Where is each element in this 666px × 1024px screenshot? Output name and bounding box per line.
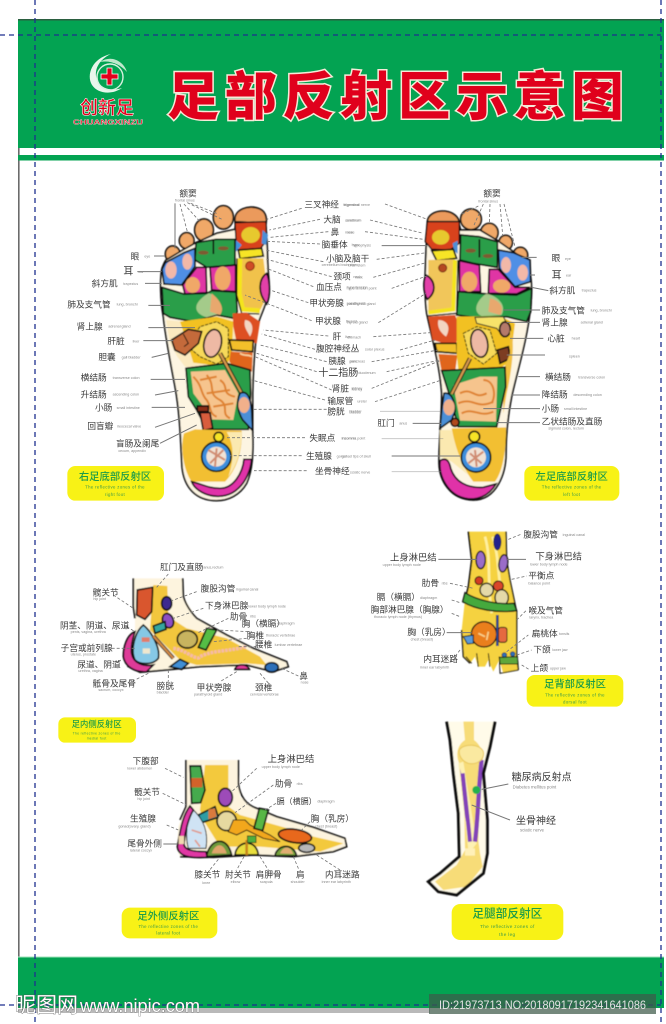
left foot labels: frontal sinus (478, 199, 498, 203)
left foot labels: stomach (347, 335, 361, 339)
instep labels: diaphragm (420, 596, 437, 600)
left foot labels: 肛门 (377, 417, 395, 428)
left foot labels: pancreas (350, 360, 365, 364)
left foot labels: transverse colon (578, 375, 605, 379)
outer foot labels: 膈（横膈） (277, 796, 317, 806)
left foot labels: 肾上腺 (542, 317, 568, 328)
callout: left foot: left foot (563, 492, 581, 497)
footer banner (18, 956, 664, 1013)
right foot labels: cerebrum (345, 218, 360, 222)
right foot labels: 输尿管 (327, 395, 354, 406)
instep labels (371, 528, 585, 673)
panel: right foot sole (67, 188, 370, 501)
left foot labels: hypophysis (353, 244, 371, 248)
right foot labels: 小脑及脑干 (326, 253, 370, 264)
right foot labels: 胰腺 (328, 355, 346, 366)
instep labels: 内耳迷路 (423, 653, 458, 664)
instep labels: 肋骨 (422, 578, 439, 588)
left foot labels: ureter (357, 400, 368, 404)
left foot labels: 耳 (552, 269, 562, 281)
inner foot labels: urethra, vagina (78, 669, 104, 673)
inner foot labels: 骶骨及尾骨 (93, 679, 136, 689)
left foot labels (342, 188, 612, 474)
right foot labels: parathyroid (347, 302, 365, 306)
instep labels: 胸部淋巴腺（胸腺） (371, 604, 449, 615)
left foot labels: hypertension point (347, 286, 377, 290)
leg labels (512, 771, 572, 833)
instep leader lines (438, 534, 532, 670)
left foot labels: heart (572, 337, 580, 341)
left foot labels: trapezius (582, 289, 597, 293)
inner foot labels: uterus, prostate (71, 652, 96, 656)
instep labels: inner ear labyrinth (420, 665, 449, 669)
callout: left foot (524, 466, 619, 501)
inner foot leader lines (108, 574, 298, 685)
outer foot illustration (177, 760, 347, 858)
outer foot labels (118, 753, 360, 885)
inner foot labels: 颈椎 (255, 682, 273, 693)
inner foot labels: 子宫或前列腺 (61, 642, 113, 653)
instep labels: larynx, trachea (529, 616, 554, 620)
right foot labels: 小肠 (95, 403, 113, 413)
right foot labels: trigeminal (343, 203, 359, 207)
right foot labels: frontal sinus (175, 199, 195, 203)
panel: leg (428, 722, 572, 940)
right foot labels: 三叉神经 (304, 198, 339, 209)
inner foot labels: lower body lymph node (248, 604, 286, 608)
callout: right foot: The reflective zones of the (85, 485, 145, 490)
inner foot labels: 肋骨 (230, 611, 247, 621)
callout: instep (527, 675, 623, 707)
left foot labels: 乙状结肠及直肠 (542, 415, 603, 426)
inner foot labels: inguinal canal (236, 588, 259, 592)
left foot labels: duodenum (358, 371, 376, 375)
instep labels: 胸（乳房） (407, 626, 451, 637)
inner foot labels: 髋关节 (93, 586, 119, 597)
right foot labels: 生殖腺 (306, 450, 332, 461)
outer foot labels: 尾骨外侧 (127, 838, 162, 849)
outer foot labels: 肩胛骨 (256, 869, 282, 880)
right foot labels: 血压点 (316, 281, 342, 292)
outer foot labels: 内耳迷路 (325, 869, 360, 880)
right foot labels: eye (144, 255, 150, 259)
right foot labels: bladder (349, 410, 362, 414)
outer foot labels: 上身淋巴结 (268, 753, 314, 764)
callout: inner foot (58, 717, 136, 743)
callout: right foot: right foot (105, 492, 126, 497)
instep labels: upper jaw (550, 666, 566, 670)
right foot labels: 鼻 (331, 226, 340, 237)
right foot labels: 肾上腺 (77, 320, 103, 331)
left foot labels: 心脏 (547, 333, 565, 344)
logo (73, 54, 143, 126)
left foot labels: ear (566, 274, 572, 278)
instep labels: upper body lymph node (383, 563, 421, 567)
callout: leg: the leg (499, 932, 516, 937)
inner foot labels: 尿道、阴道 (77, 659, 121, 670)
instep labels: ribs (442, 581, 448, 585)
instep labels: lower jaw (552, 648, 568, 652)
inner foot labels (60, 561, 309, 697)
instep illustration (462, 532, 518, 673)
instep labels: lower body lymph node (530, 562, 568, 566)
callout: leg: 足腿部反射区 (472, 906, 543, 920)
callout: leg (452, 904, 563, 940)
callout: outer foot: lateral foot (156, 931, 181, 936)
callout: inner foot: The reflective zones of the (73, 731, 121, 735)
right foot labels: ascending colon (113, 393, 139, 397)
right foot labels: 甲状腺 (315, 315, 341, 326)
instep labels: chest (breast) (411, 637, 433, 641)
right foot labels: kidney (352, 387, 362, 391)
instep labels: 平衡点 (528, 569, 555, 580)
inner foot labels: 腹股沟管 (201, 583, 236, 594)
outer foot labels: inner ear labyrinth (322, 880, 351, 884)
right foot labels: small intestine (117, 406, 140, 410)
outer foot labels: 肩 (296, 869, 305, 880)
right foot labels: gall bladder (122, 355, 141, 359)
inner foot labels: sacrum, coccyx (98, 688, 124, 692)
right foot labels: 耳 (123, 266, 133, 278)
left foot labels: adrenal gland (581, 320, 603, 324)
right foot labels: 斜方肌 (92, 278, 118, 289)
inner foot labels: 下身淋巴腺 (205, 600, 249, 611)
right foot labels: hypo (352, 243, 360, 247)
callout: right foot (67, 466, 164, 501)
inner foot labels: 甲状旁腺 (197, 682, 232, 693)
left foot labels: bladder (349, 410, 362, 414)
panel: left foot sole (342, 188, 619, 501)
right foot labels: 颈项 (333, 271, 351, 281)
left foot labels: thyroid gland (347, 320, 368, 324)
outer foot labels: 膝关节 (194, 869, 221, 880)
title: 足部反射区示意图 (167, 69, 629, 127)
right foot labels: liver (133, 339, 140, 343)
left foot labels: 降结肠 (542, 388, 568, 399)
outer foot labels: lateral coccyx (130, 848, 152, 852)
leg labels: sciatic nerve (520, 828, 545, 833)
watermark (15, 994, 200, 1017)
logo: CHUANGXINZU (73, 118, 143, 126)
right foot labels: insomnia (342, 437, 357, 441)
instep labels: thoracic lymph node (thymus) (374, 615, 422, 619)
inner foot labels: thoracic vertebrae (266, 634, 295, 638)
panel: instep of foot (371, 528, 623, 707)
right foot labels: lung, bronchi (117, 303, 138, 307)
instep labels: 上颌 (531, 662, 548, 673)
inner foot labels: penis, vagina, urethra (71, 630, 107, 634)
left foot labels: 小肠 (542, 404, 559, 414)
panel: outer foot (118, 753, 360, 938)
left foot labels: 眼 (552, 253, 561, 263)
left foot illustration (424, 209, 532, 500)
left foot labels: nose (347, 230, 355, 234)
watermark: 昵图网 (15, 994, 78, 1017)
right foot labels: 肝 (333, 331, 342, 341)
right foot labels: 升结肠 (81, 388, 107, 399)
instep labels: 下颌 (533, 644, 551, 655)
left foot labels: solar plexus (365, 348, 385, 352)
image id box (429, 994, 656, 1014)
leg labels: 坐骨神经 (516, 814, 556, 827)
right foot labels: cerebellum brain stem (322, 263, 358, 267)
instep labels: 扁桃体 (532, 628, 558, 639)
inner foot labels: bladder (157, 690, 170, 694)
watermark: www.nipic.com (79, 996, 200, 1016)
left foot labels: insomnia point (342, 437, 365, 441)
outer foot labels: 下腹部 (133, 755, 159, 766)
inner foot labels: 膀胱 (157, 680, 174, 691)
right foot labels: panc (349, 360, 357, 364)
inner foot labels: ribs (250, 615, 256, 619)
panel: inner foot (58, 561, 309, 743)
header banner (18, 19, 664, 160)
inner foot labels: hip joint (93, 597, 106, 601)
left foot labels: cerebrum (346, 218, 361, 222)
left foot labels: 横结肠 (545, 371, 571, 382)
right foot labels: 脑垂体 (322, 238, 348, 249)
leg leader lines (472, 784, 510, 820)
leg labels: 糖尿病反射点 (512, 771, 572, 784)
left foot labels: neck (353, 275, 361, 279)
instep labels: 膈（横膈） (377, 591, 420, 602)
inner foot labels: 胸椎 (247, 629, 264, 640)
left foot labels: lung, bronchi (591, 309, 612, 313)
inner foot labels: 鼻 (299, 670, 308, 681)
inner foot illustration (123, 578, 288, 672)
image id box: ID:21973713 NO:20180917192341641086 (439, 998, 646, 1012)
left foot labels: 斜方肌 (549, 284, 576, 295)
instep labels: tonsils (559, 632, 570, 636)
instep labels: 下身淋巴结 (535, 550, 582, 561)
outer foot labels: diaphragm (317, 800, 335, 804)
outer foot labels: 肋骨 (275, 779, 292, 789)
inner foot labels: diaphragm (277, 622, 295, 626)
inner foot labels: 阴茎、阴道、尿道 (60, 620, 130, 631)
right foot illustration (161, 206, 269, 501)
callout: instep: dorsal foot (563, 699, 587, 704)
outer foot leader lines (163, 768, 340, 872)
right foot labels: adrenal gland (108, 325, 131, 329)
callout: instep: The reflective zones of the (545, 693, 605, 698)
right foot labels: 大脑 (323, 214, 341, 225)
outer foot labels: shoulder (291, 880, 305, 884)
outer foot labels: 生殖腺 (130, 813, 156, 824)
outer foot labels: knee (202, 881, 210, 885)
leg labels: Diabetes mellitus point (513, 785, 557, 790)
right foot labels: cecum, appendix (118, 449, 146, 453)
inner foot labels: nose (301, 680, 309, 684)
left foot labels: 肺及支气管 (542, 304, 585, 315)
left foot labels: eye (565, 257, 571, 261)
left foot labels: descending colon (573, 393, 602, 397)
instep labels: inguinal canal (563, 533, 585, 537)
left foot labels: parathyroid gland (347, 302, 376, 306)
right foot labels: 肾脏 (332, 383, 349, 394)
outer foot labels: hip joint (137, 797, 150, 801)
callout: left foot: The reflective zones of the (542, 485, 602, 490)
callout: outer foot: The reflective zones of the (138, 924, 198, 929)
right foot leader lines (137, 203, 332, 471)
left foot labels: small intestine (564, 407, 587, 411)
right foot labels: liver (345, 335, 352, 339)
callout: right foot: 右足底部反射区 (79, 470, 151, 483)
outer foot labels: chest (breast) (315, 824, 337, 828)
right foot labels: 腹腔神经丛 (316, 343, 360, 354)
right foot labels: nose (345, 230, 353, 234)
right foot labels: gonad (337, 455, 347, 459)
inner foot labels: lumbar vertebrae (275, 643, 302, 647)
right foot labels: 甲状旁腺 (309, 297, 344, 308)
left foot labels: gonad tips of skull (342, 455, 371, 459)
right foot labels: 回盲瓣 (87, 420, 114, 431)
callout: left foot: 左足底部反射区 (536, 470, 608, 483)
left foot labels: 额窦 (483, 188, 501, 199)
instep labels: 上身淋巴结 (390, 552, 437, 563)
right foot labels: transverse colon (113, 376, 139, 380)
outer foot labels: 胸（乳房） (311, 812, 354, 823)
right foot labels: neck (355, 275, 363, 279)
callout: instep: 足背部反射区 (544, 678, 606, 691)
left foot labels: trigeminal nerve (344, 203, 370, 207)
right foot labels: 盲肠及阑尾 (116, 438, 160, 449)
inner foot labels: 肛门及直肠 (160, 561, 204, 572)
outer foot labels: scapula (260, 880, 274, 884)
inner foot labels: 腰椎 (255, 639, 273, 650)
inner foot labels: cervical vertebrae (250, 693, 279, 697)
outer foot labels: upper body lymph node (262, 765, 300, 769)
instep labels: 喉及气管 (528, 604, 563, 615)
right foot labels: ear (138, 270, 144, 274)
right foot labels: 肺及支气管 (67, 298, 111, 309)
left foot labels: spleen (569, 354, 580, 358)
outer foot labels: 髋关节 (134, 786, 160, 797)
left foot labels: anus (399, 421, 407, 425)
right foot labels: 眼 (131, 251, 140, 261)
callout: outer foot: 足外侧反射区 (137, 909, 199, 922)
outer foot labels: lower abdomen (127, 766, 152, 770)
right foot labels: thyroid (346, 320, 357, 324)
right foot labels: 肝脏 (107, 335, 125, 346)
right foot labels: 膀胱 (327, 406, 345, 417)
right foot labels: 横结肠 (81, 372, 107, 383)
right foot labels: ileocecal valve (117, 425, 141, 429)
right foot labels: 额窦 (179, 188, 197, 199)
right foot labels: hypertension (347, 285, 368, 289)
inner foot labels: parathyroid gland (194, 693, 222, 697)
left foot labels: brain stem (348, 264, 365, 268)
left foot labels: kidney (352, 387, 362, 391)
left foot labels: sciatic nerve (350, 470, 370, 474)
leg illustration (428, 722, 495, 895)
callout: inner foot: medial foot (87, 737, 107, 741)
right foot labels: 胆囊 (98, 351, 116, 362)
outer foot labels: gonad(ovary, gland) (118, 824, 151, 828)
callout: leg: The reflective zones of (480, 924, 535, 929)
instep labels: 腹股沟管 (523, 528, 558, 539)
outer foot labels: 肘关节 (225, 869, 251, 880)
callout: inner foot: 足内侧反射区 (72, 719, 122, 729)
logo: 创新足 (80, 97, 134, 118)
instep labels: balance point (528, 581, 550, 585)
left foot leader lines (365, 204, 548, 472)
left foot labels: sigmoid colon, rectum (548, 427, 584, 431)
right foot labels: 失眠点 (309, 432, 336, 443)
callout: outer foot (122, 908, 217, 938)
inner foot labels: anus,rectum (203, 566, 223, 570)
right foot labels (67, 188, 370, 476)
right foot labels: trapezius (123, 282, 138, 286)
outer foot labels: elbow (231, 880, 241, 884)
right foot labels: 十二指肠 (318, 366, 358, 379)
right foot labels: 坐骨神经 (315, 465, 350, 476)
outer foot labels: ribs (297, 782, 303, 786)
inner foot labels: 胸（横膈） (242, 618, 285, 629)
